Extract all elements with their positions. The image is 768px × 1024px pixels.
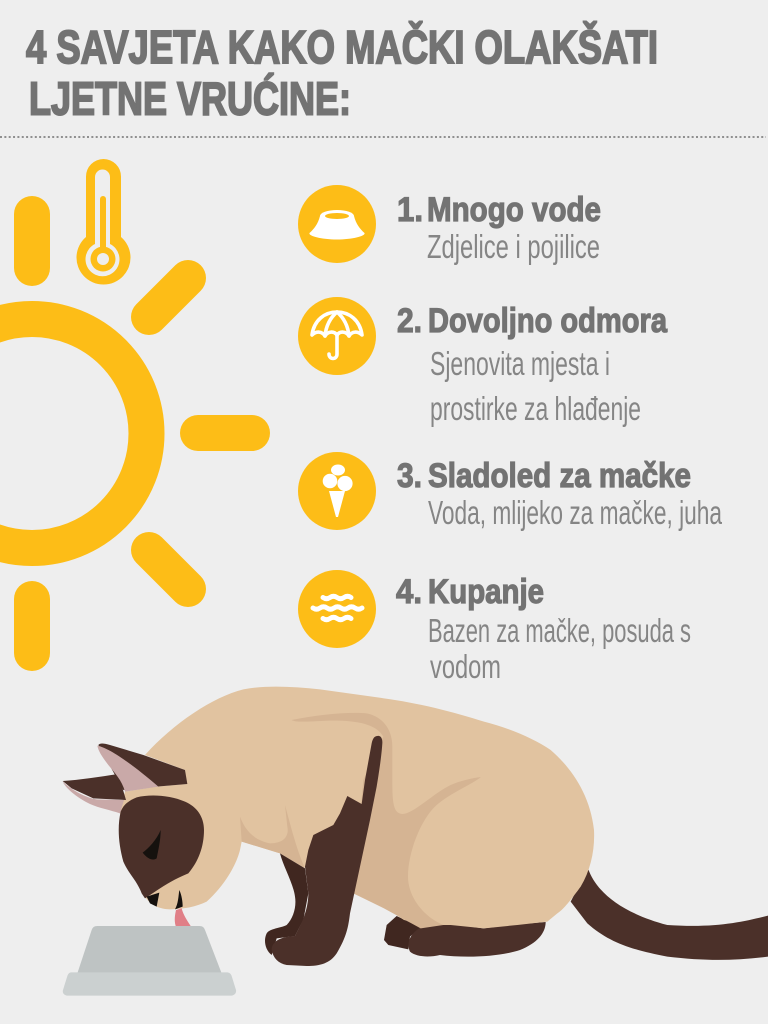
text: tip 2 description: Sjenovita mjesta i <box>430 346 610 383</box>
cat right ear <box>97 743 187 792</box>
heading: tip 3: Sladoled za mačke <box>428 457 691 495</box>
cat left ear <box>63 774 126 813</box>
heading: tip 3: 3. <box>397 457 422 495</box>
heading: tip 4: Kupanje <box>428 573 544 611</box>
cat face <box>119 795 204 909</box>
cat tail <box>571 868 768 960</box>
icon: bowl <box>298 185 376 263</box>
cat tongue <box>175 908 191 926</box>
title <box>26 21 658 124</box>
cat hind paw <box>384 916 546 957</box>
icon: thermometer <box>77 159 130 285</box>
cat back foreleg <box>265 853 308 955</box>
text: tip 4 description <box>428 613 691 686</box>
title: LJETNE VRUĆINE: <box>29 72 351 124</box>
illustration: cat drinking from bowl <box>63 687 768 996</box>
cat body shading <box>240 713 481 928</box>
panel: tip 4 <box>298 570 691 686</box>
cat front foreleg <box>272 736 382 966</box>
text: tip 1 description: Zdjelice i pojilice <box>427 229 600 266</box>
panel: tip 3 <box>298 452 722 532</box>
heading: tip 1: Mnogo vode <box>427 191 601 229</box>
text: tip 2 description <box>430 346 641 428</box>
icon: sun <box>0 214 252 653</box>
heading: tip 2: Dovoljno odmora <box>428 302 668 340</box>
icon: umbrella <box>298 297 376 375</box>
text: tip 4 description: vodom <box>430 649 501 686</box>
heading: tip 1: 1. <box>397 191 423 229</box>
heading: tip 4: 4. <box>396 573 422 611</box>
heading: tip 4 <box>396 573 544 611</box>
water bowl <box>63 926 236 996</box>
cat body <box>120 687 594 928</box>
icon: water waves <box>298 570 376 648</box>
text: tip 2 description: prostirke za hlađenje <box>430 391 641 428</box>
icon: ice cream <box>298 452 376 530</box>
panel: tip 2 <box>298 297 668 428</box>
panel: tip 1 <box>298 185 601 266</box>
heading: tip 2: 2. <box>397 302 422 340</box>
